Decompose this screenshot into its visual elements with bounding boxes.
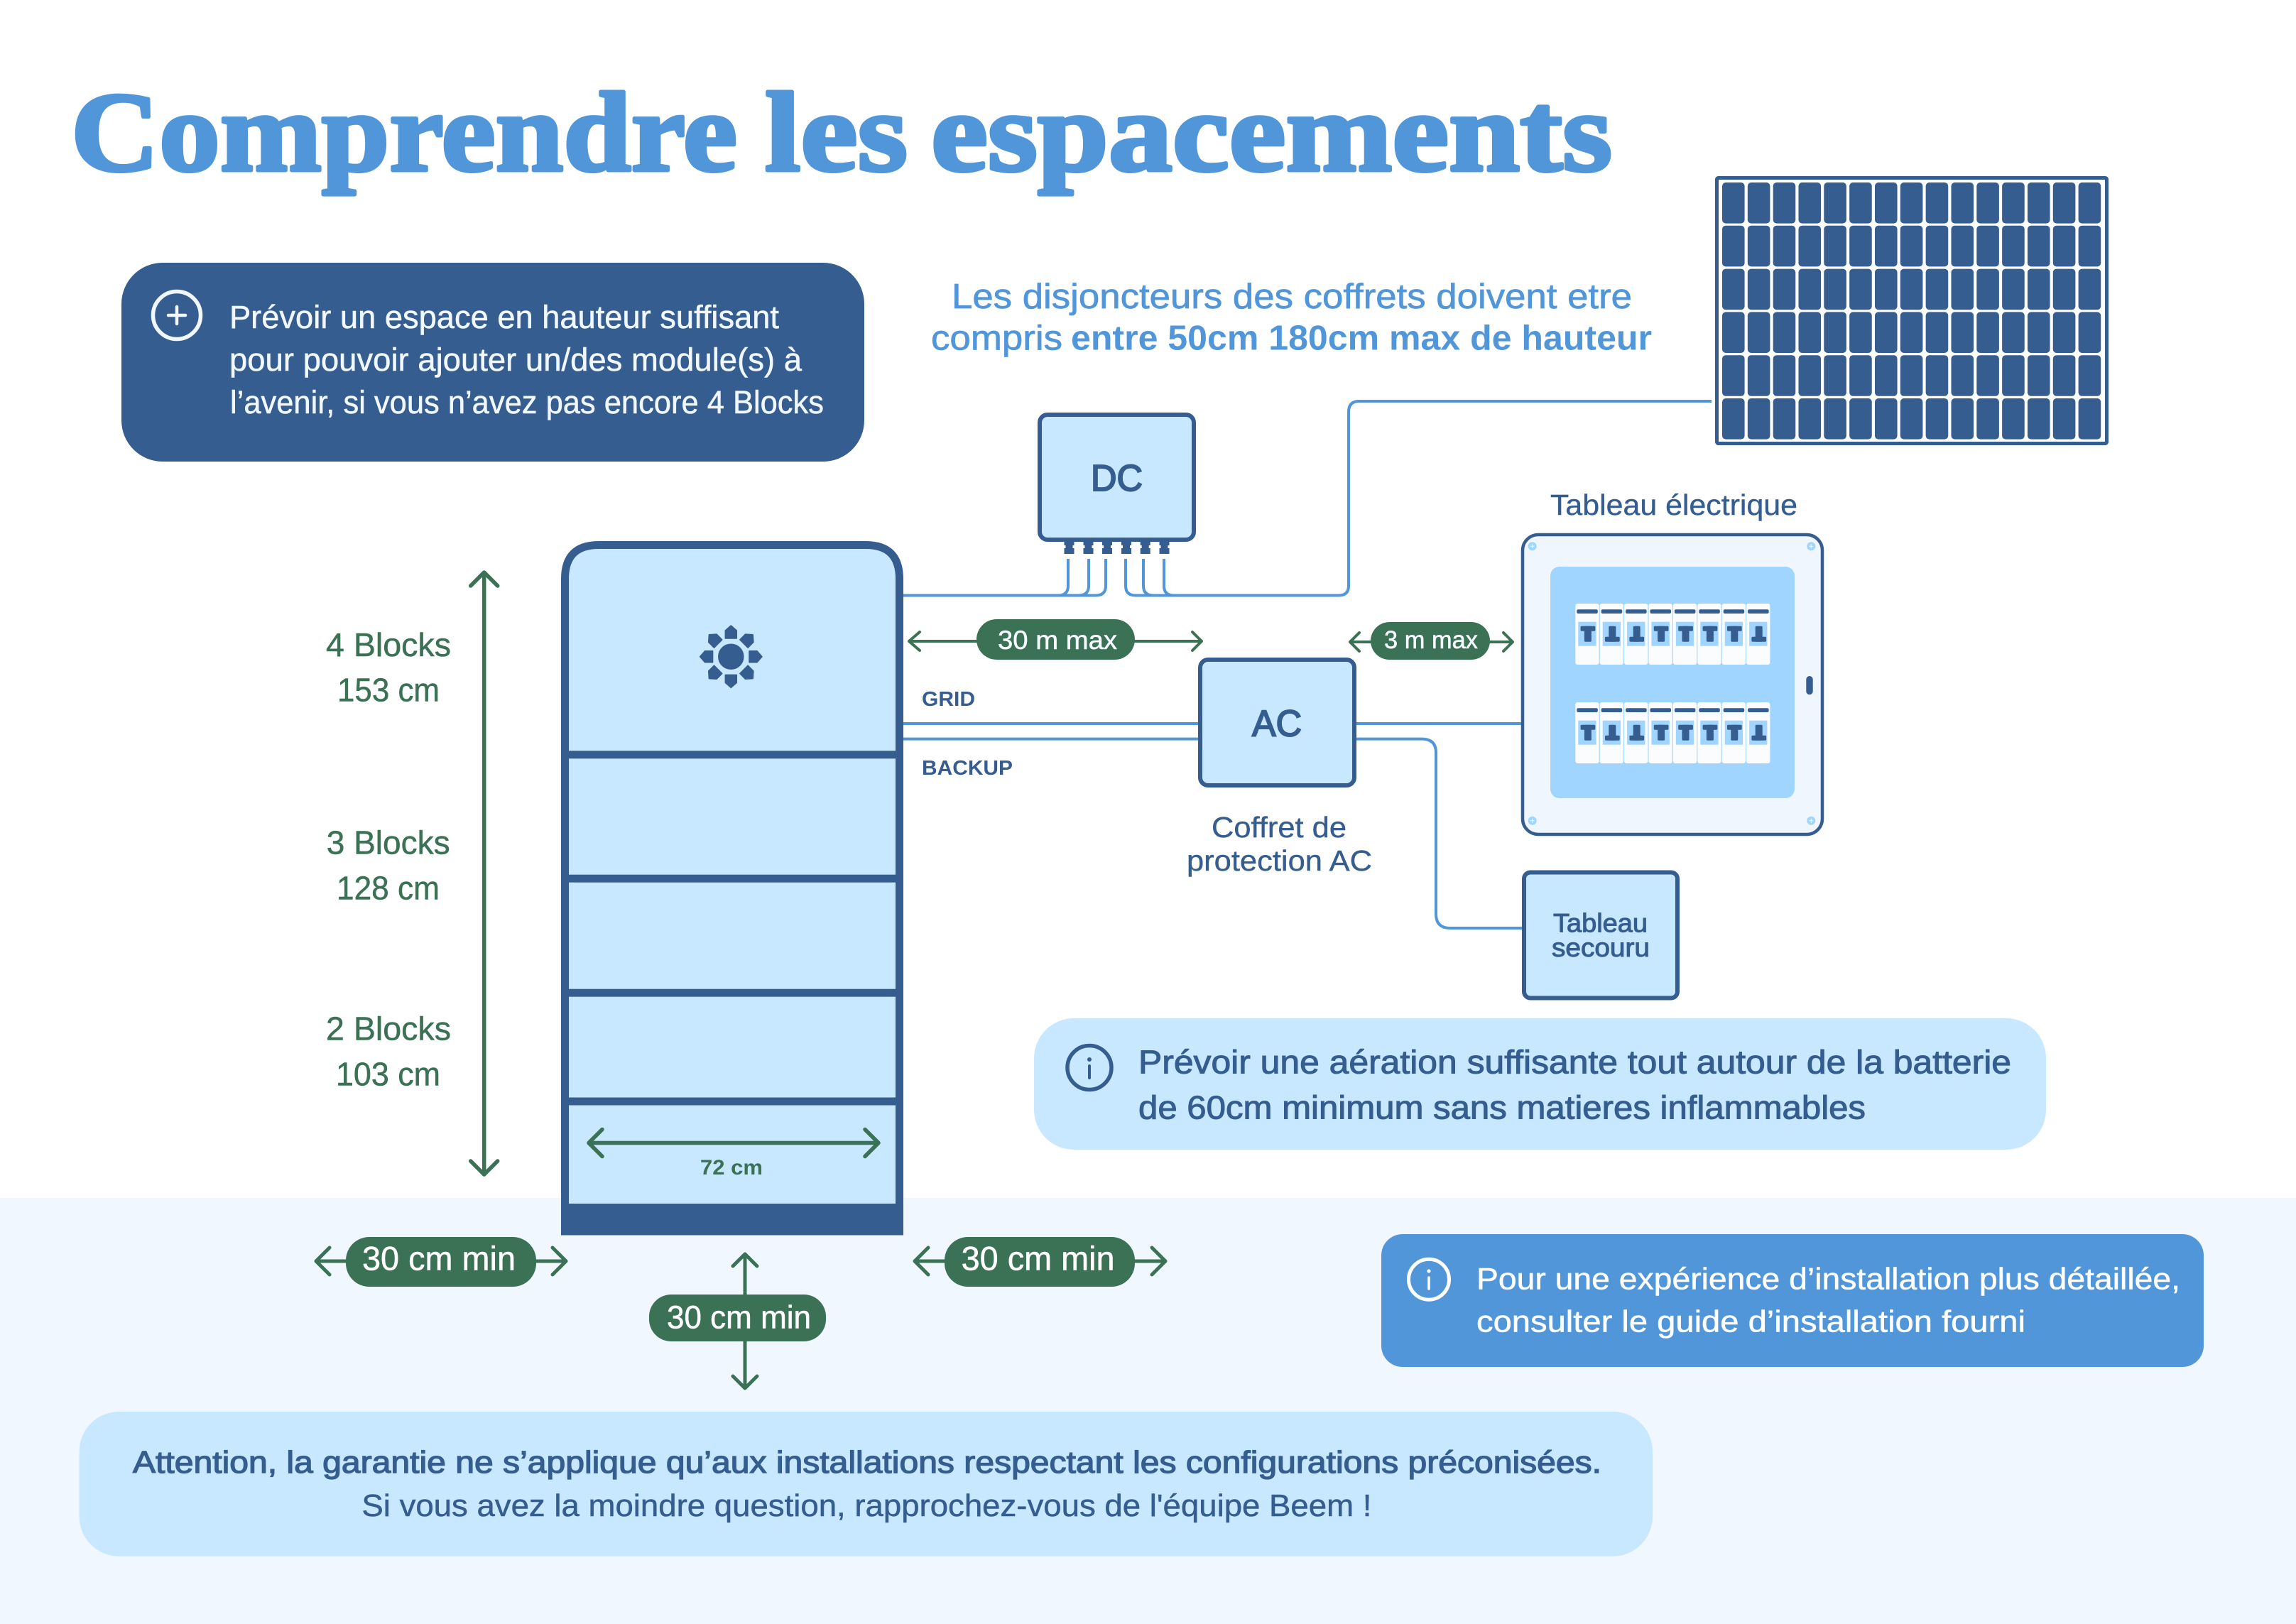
title: Comprendre [71, 69, 737, 195]
dimension: 30 m max [909, 619, 1202, 660]
label: 72 cm: 72 cm [700, 1156, 763, 1179]
battery stack [561, 545, 903, 1235]
guide text [1476, 1263, 2180, 1339]
title: espacements [931, 69, 1612, 195]
label: coffret de protection AC: Coffret de [1212, 811, 1346, 844]
icon: info [1409, 1259, 1449, 1299]
clearance: front [649, 1254, 826, 1388]
icon: solar panel [1717, 178, 2106, 443]
clearance: left [316, 1237, 566, 1287]
arrow: width 72 cm [589, 1129, 878, 1156]
height labels [326, 626, 451, 1092]
backup panel label: secouru [1552, 933, 1650, 962]
panel inner tray [1550, 567, 1795, 798]
breakers row 1 [1575, 604, 1770, 665]
heading: breaker height: entre 50cm 180cm max de hauteur [1071, 320, 1652, 358]
label: tableau electrique: Tableau électrique [1550, 489, 1797, 521]
labels: GRID and BACKUP [922, 688, 1013, 780]
ventilation text [1138, 1044, 2011, 1126]
dimension: 3 m max [1350, 622, 1513, 660]
arrow: height [471, 572, 498, 1175]
height labels: 153 cm [337, 672, 440, 709]
heading: breaker height [931, 278, 1652, 358]
guide text: consulter le guide d’installation fourni [1476, 1305, 2025, 1339]
title [71, 69, 1612, 195]
labels: GRID and BACKUP: GRID [922, 688, 975, 711]
clearance: left: 30 cm min [362, 1240, 516, 1277]
backup panel label [1552, 909, 1650, 962]
DC connectors [1064, 541, 1169, 554]
icon: info [1067, 1045, 1111, 1089]
wires: DC and AC cabling [903, 401, 1712, 928]
warranty text: Si vous avez la moindre question, rapprochez-vous de l'équipe Beem ! [361, 1488, 1371, 1523]
label: coffret de protection AC: protection AC [1187, 844, 1372, 877]
callout: warranty [80, 1412, 1653, 1557]
electrical panel [1523, 535, 1822, 834]
DC box [1040, 415, 1194, 554]
guide text: Pour une expérience d’installation plus détaillée, [1476, 1263, 2180, 1297]
icon: plus [153, 291, 200, 339]
heading: breaker height: compris [931, 320, 1062, 358]
AC label: AC [1252, 704, 1302, 745]
callout: ventilation [1034, 1018, 2046, 1150]
warranty text [133, 1445, 1601, 1523]
height labels: 103 cm [336, 1055, 440, 1092]
warranty text: Attention, la garantie ne s’applique qu’aux installations respectant les configurations préconisées. [133, 1445, 1601, 1480]
callout text: pour pouvoir ajouter un/des module(s) à [229, 342, 802, 378]
icon: sun [700, 626, 762, 687]
panel handle [1806, 676, 1813, 694]
callout: add modules [121, 263, 864, 462]
backup panel label: Tableau [1553, 909, 1648, 937]
dimension: 3 m max: 3 m max [1384, 626, 1478, 654]
callout text [229, 299, 824, 420]
clearance: right: 30 cm min [962, 1240, 1115, 1277]
AC box [1200, 660, 1354, 785]
callout text: Prévoir un espace en hauteur suffisant [229, 299, 779, 335]
dimension: 30 m max: 30 m max [998, 626, 1118, 655]
label: coffret de protection AC [1187, 811, 1372, 877]
callout: installation guide [1381, 1234, 2204, 1367]
height labels: 2 Blocks [326, 1010, 451, 1047]
height labels: 3 Blocks [327, 824, 450, 861]
ventilation text: Prévoir une aération suffisante tout autour de la batterie [1138, 1044, 2011, 1081]
floor band [0, 1198, 2296, 1624]
ventilation text: de 60cm minimum sans matieres inflammables [1138, 1089, 1866, 1126]
heading: breaker height: Les disjoncteurs des coffrets doivent etre [952, 278, 1632, 316]
height labels: 4 Blocks [326, 626, 451, 663]
height labels: 128 cm [337, 870, 440, 907]
clearance: front: 30 cm min [667, 1299, 811, 1335]
callout text: l’avenir, si vous n’avez pas encore 4 Blocks [230, 384, 824, 420]
DC label: DC [1091, 458, 1143, 499]
backup panel box [1524, 872, 1677, 998]
breakers row 2 [1575, 702, 1770, 763]
title: les [765, 69, 908, 195]
labels: GRID and BACKUP: BACKUP [922, 757, 1013, 780]
clearance: right [915, 1237, 1165, 1287]
